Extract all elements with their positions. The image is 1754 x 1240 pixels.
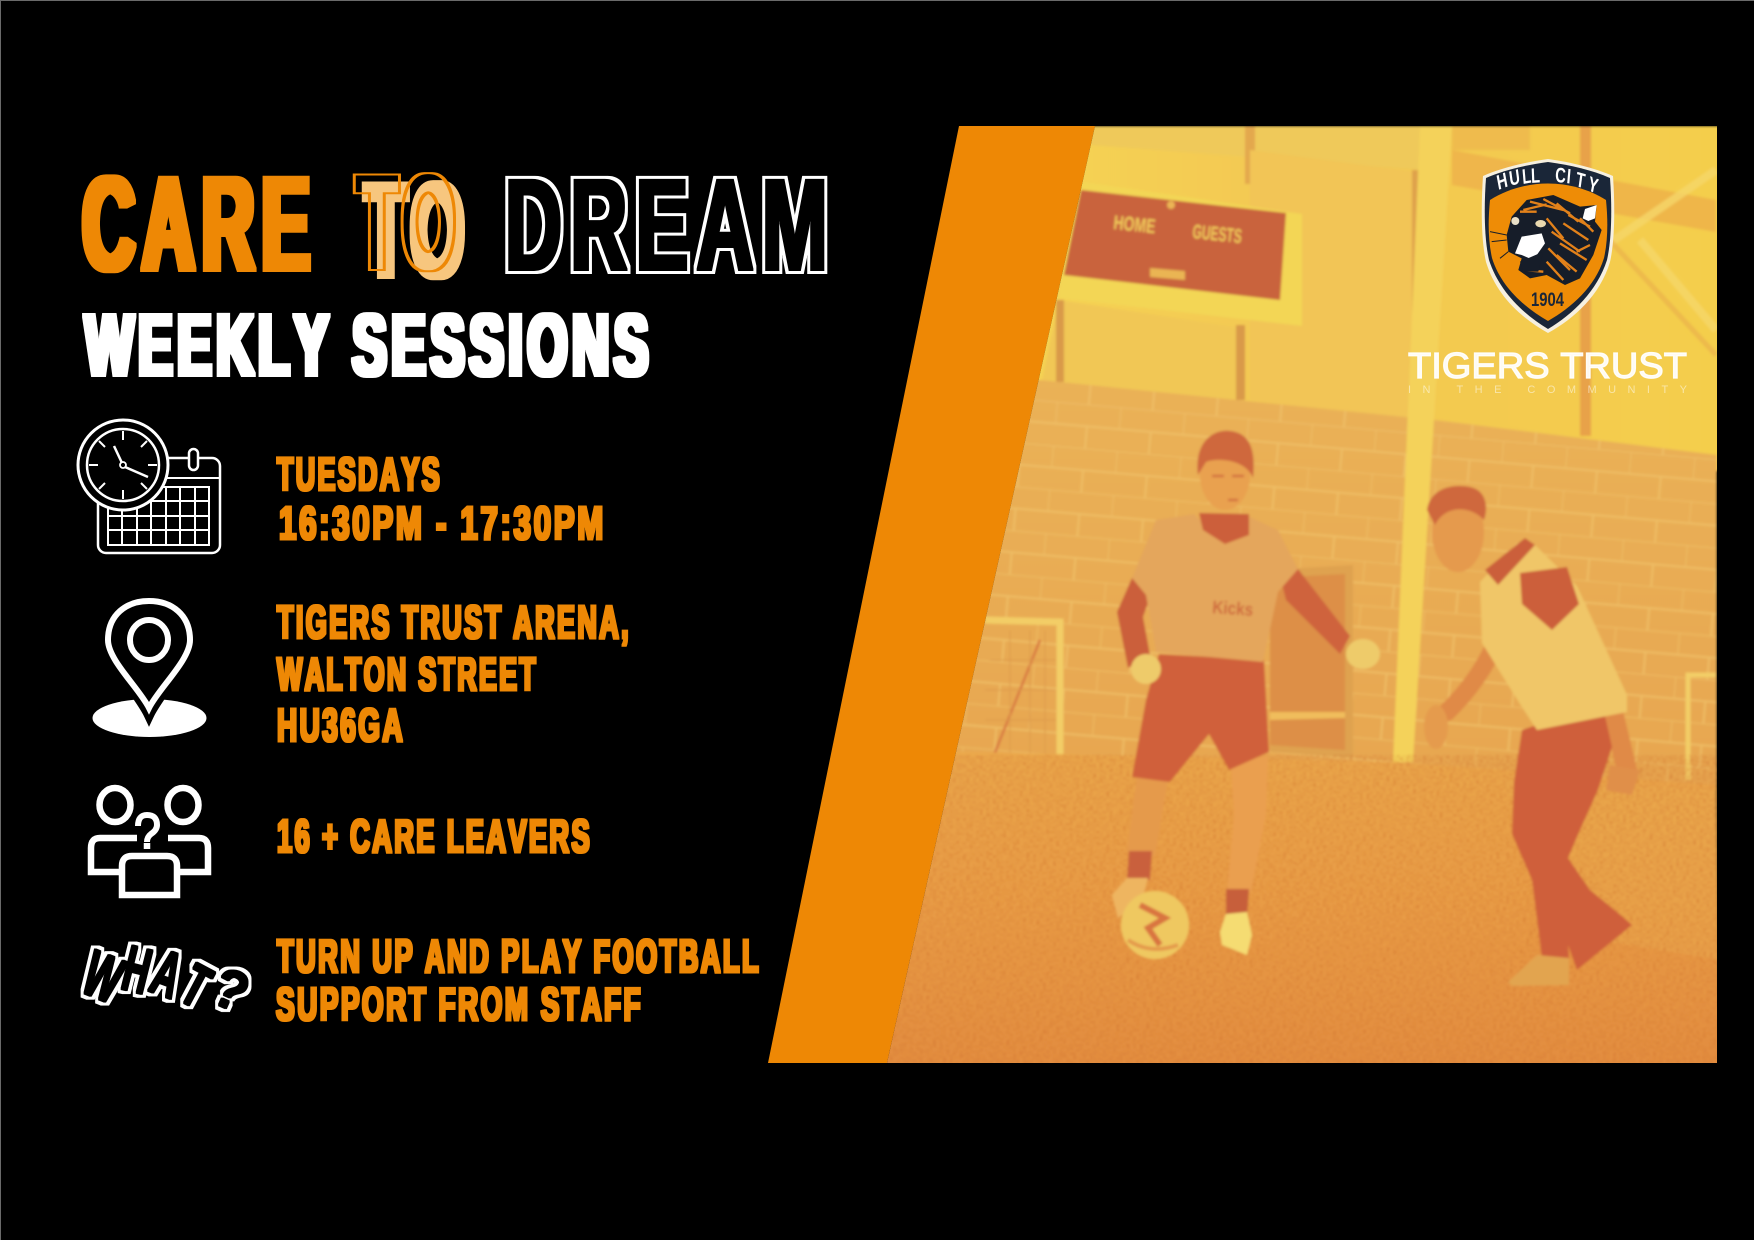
icon: WHAT? lettering: T xyxy=(170,952,221,1021)
photo background: upper wall xyxy=(1038,126,1717,473)
orange diagonal band xyxy=(768,126,1095,1063)
icon: people with question mark xyxy=(91,788,208,895)
photo: left player xyxy=(1112,431,1380,955)
icon: WHAT? lettering: W xyxy=(73,937,133,1018)
text: day and time xyxy=(277,448,606,549)
title word: DREAM: DREAM xyxy=(505,151,836,298)
text: venue address: HU36GA xyxy=(277,699,405,751)
panel: duotone football photo xyxy=(880,126,1720,1070)
photo: door xyxy=(1270,565,1353,758)
text: venue address xyxy=(277,596,631,751)
photo: scoreboard xyxy=(1059,180,1302,326)
icon: WHAT? lettering: A xyxy=(142,936,192,1013)
icon: WHAT? lettering: H xyxy=(116,933,158,1009)
photo: left player: Kicks xyxy=(1212,597,1254,620)
text: what happens: SUPPORT FROM STAFF xyxy=(276,978,643,1030)
text: what happens xyxy=(276,930,761,1030)
text: venue address: TIGERS TRUST ARENA, xyxy=(277,596,631,648)
title word: TO: TO xyxy=(356,149,459,297)
text: day and time: 16:30PM - 17:30PM xyxy=(279,497,606,549)
logo text: Tigers Trust in the Community: IN THE COMMUNITY xyxy=(1408,384,1688,396)
title word: CARE: CARE xyxy=(82,150,318,299)
photo: scoreboard: HOME xyxy=(1113,211,1157,238)
photo: scoreboard: GUESTS xyxy=(1191,221,1243,248)
logo: Hull City crest xyxy=(1482,159,1614,333)
text: venue address: WALTON STREET xyxy=(277,648,538,700)
photo: floor xyxy=(880,750,1720,1070)
icon: WHAT? lettering xyxy=(73,933,258,1025)
icon: map pin xyxy=(92,601,206,737)
icon: clock and calendar xyxy=(78,420,220,553)
photo: small goals xyxy=(985,620,1716,780)
photo: pillar xyxy=(1393,126,1452,762)
crest text: 1904: 1904 xyxy=(1531,290,1564,311)
text: day and time: TUESDAYS xyxy=(277,448,442,500)
subtitle: Weekly Sessions: WEEKLY SESSIONS xyxy=(85,297,653,394)
photo: football xyxy=(1121,891,1189,959)
logo text: Tigers Trust in the Community: TIGERS TRUST xyxy=(1408,345,1687,386)
photo: right player xyxy=(1424,486,1640,986)
title: Care To Dream xyxy=(82,149,836,299)
crest: tiger head xyxy=(1490,195,1602,285)
icon: WHAT? lettering: ? xyxy=(204,956,258,1025)
photo: brick wall xyxy=(956,379,1717,792)
crest text: HULL CITY: HULL CITY xyxy=(1495,163,1600,198)
text: audience: 16 + CARE LEAVERS xyxy=(277,810,592,862)
text: what happens: TURN UP AND PLAY FOOTBALL xyxy=(277,930,761,982)
